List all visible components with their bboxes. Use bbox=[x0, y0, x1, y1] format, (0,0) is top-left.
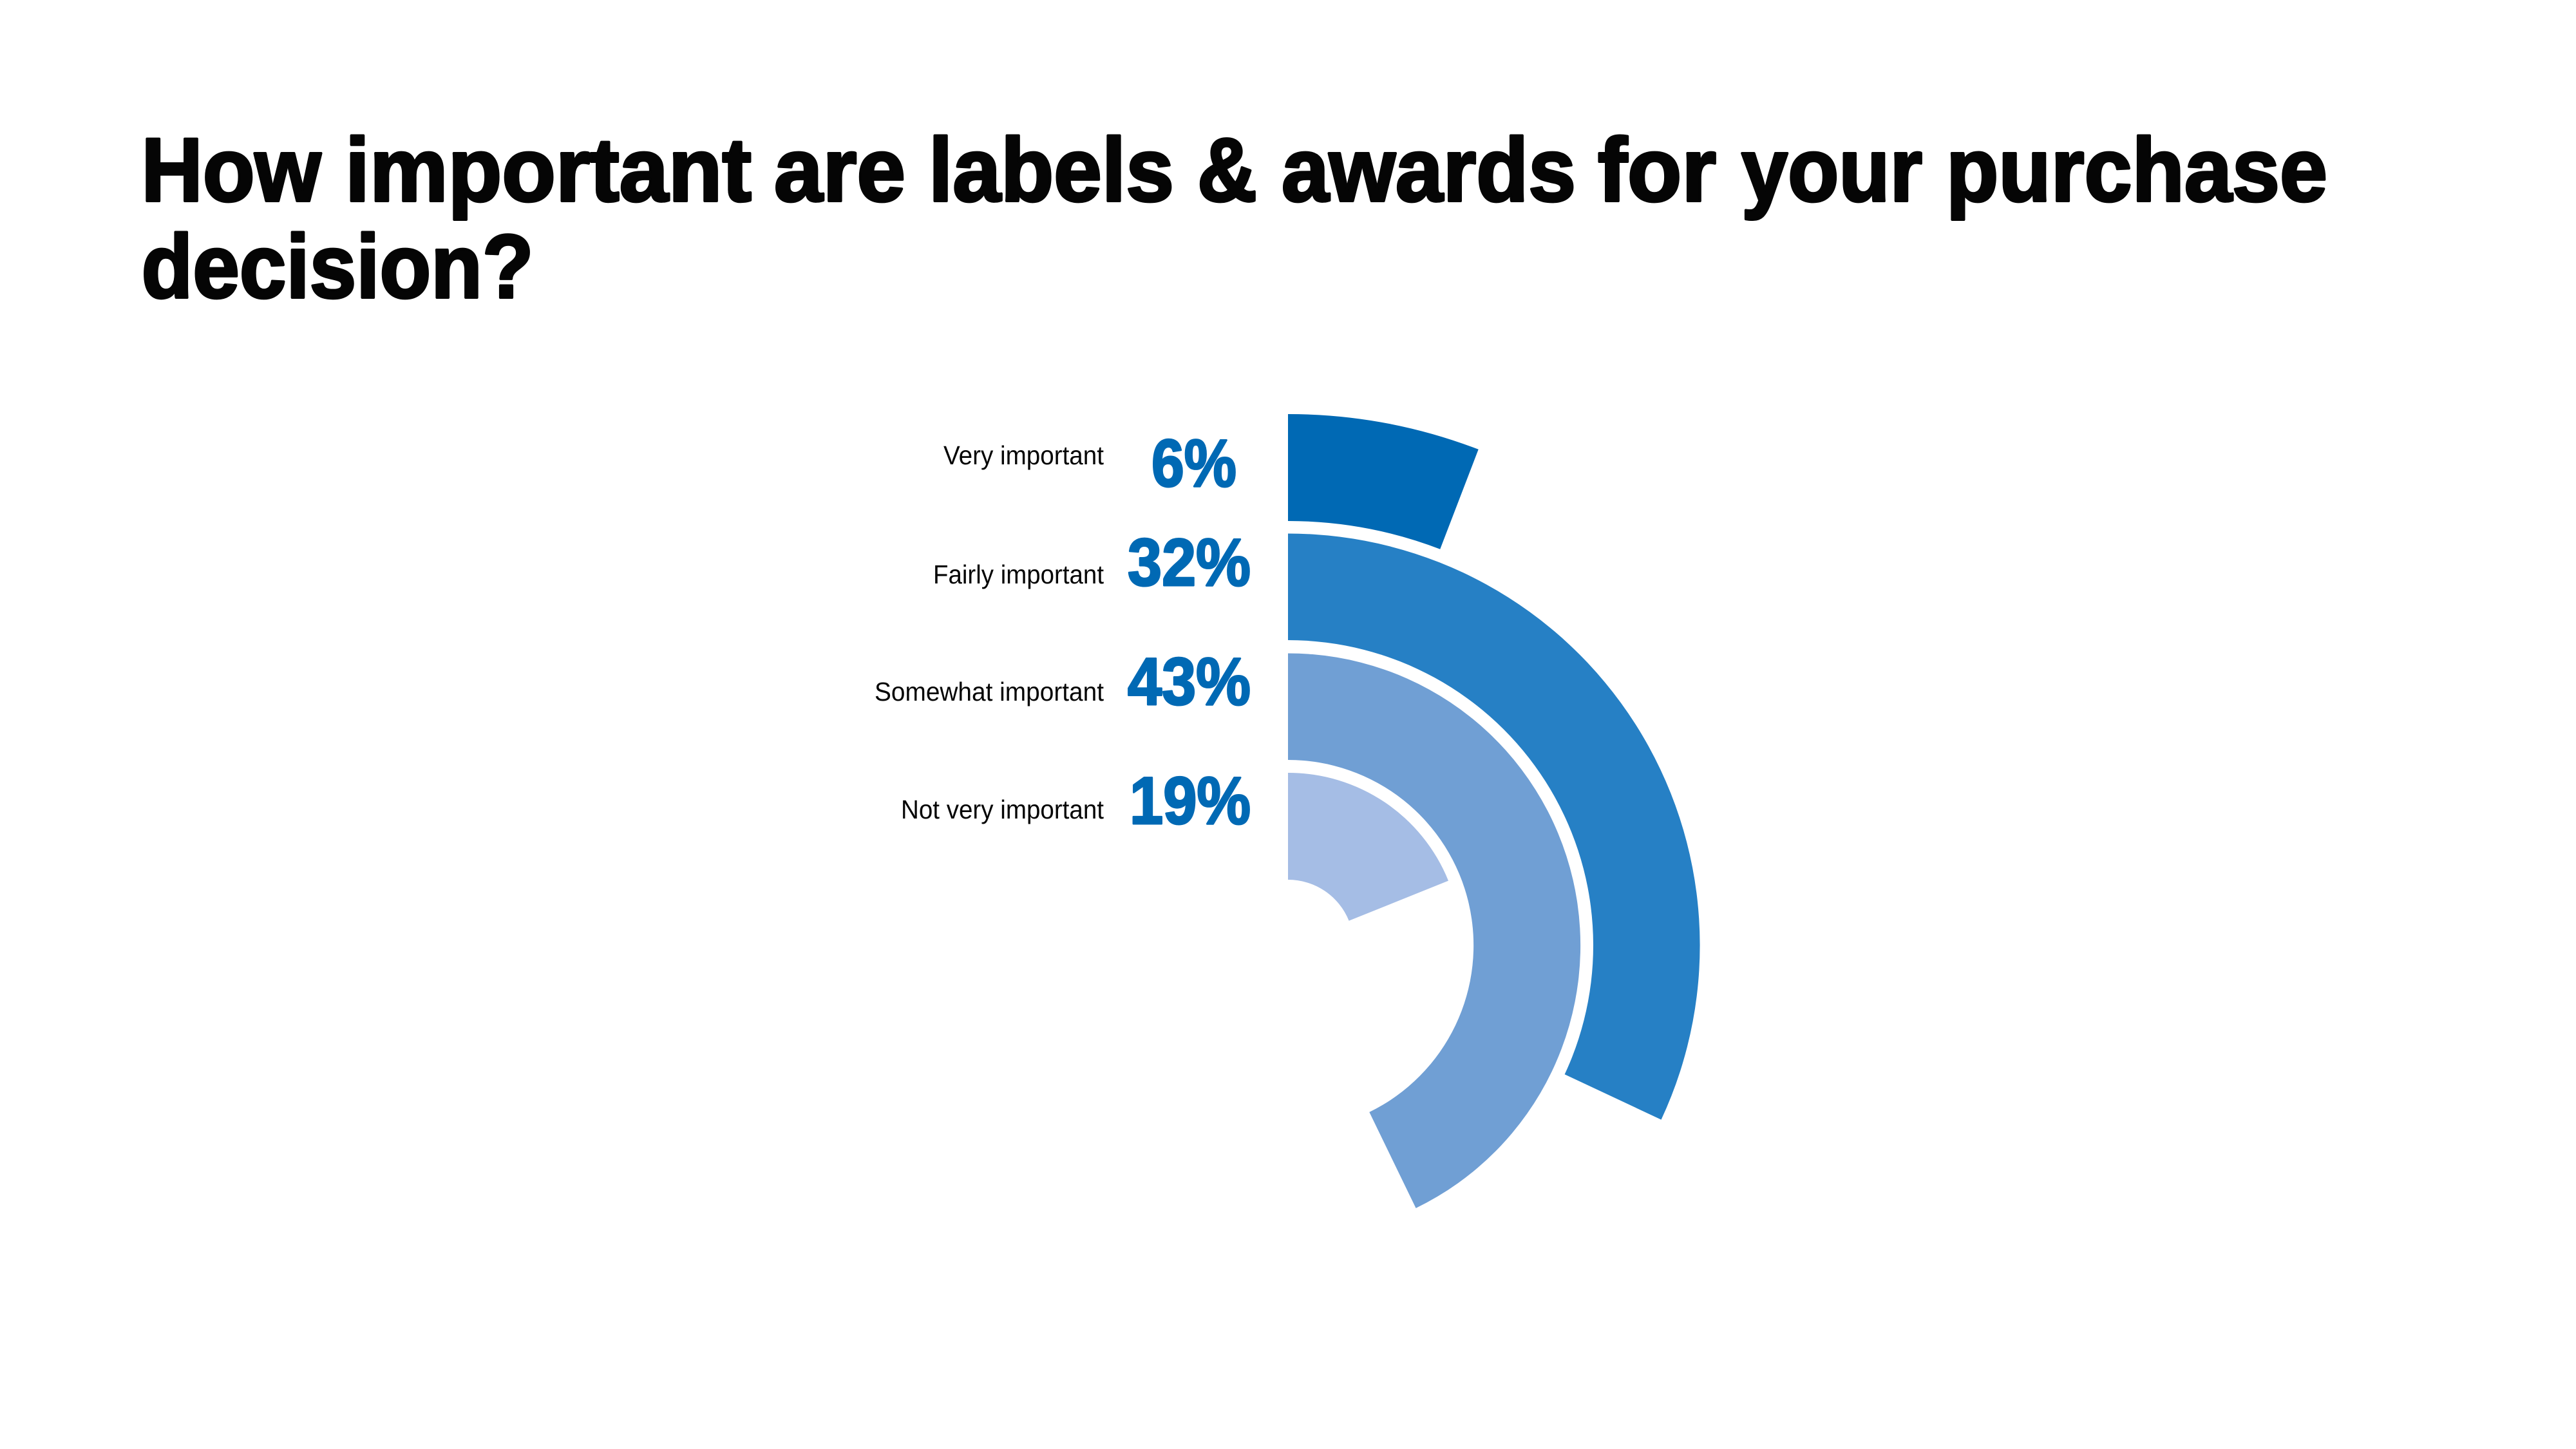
label: very important: Very important bbox=[943, 440, 1104, 470]
title: for bbox=[1598, 119, 1716, 220]
label: fairly important: Fairly important bbox=[933, 560, 1104, 589]
arc: fairly important 32% bbox=[1288, 533, 1700, 1120]
label: not very important: Not very important bbox=[901, 795, 1104, 824]
arc: very important 6% bbox=[1288, 414, 1479, 549]
value: 32%: 32% bbox=[1128, 526, 1251, 600]
title: awards bbox=[1282, 119, 1576, 220]
title: are bbox=[774, 119, 905, 220]
title: your bbox=[1741, 119, 1922, 220]
title: labels bbox=[929, 119, 1174, 220]
title: How bbox=[141, 119, 321, 220]
arc: not very important 19% bbox=[1288, 773, 1448, 921]
value: 43%: 43% bbox=[1128, 645, 1251, 719]
value: 6%: 6% bbox=[1151, 426, 1236, 501]
title: & bbox=[1197, 119, 1257, 220]
title bbox=[141, 119, 2327, 317]
label: somewhat important: Somewhat important bbox=[875, 677, 1104, 706]
value: 19%: 19% bbox=[1130, 764, 1251, 838]
radial bar chart bbox=[1288, 414, 1700, 1208]
title: important bbox=[345, 119, 752, 220]
title: decision? bbox=[142, 216, 534, 317]
title: purchase bbox=[1946, 119, 2327, 220]
arc: somewhat important 43% bbox=[1288, 653, 1580, 1208]
